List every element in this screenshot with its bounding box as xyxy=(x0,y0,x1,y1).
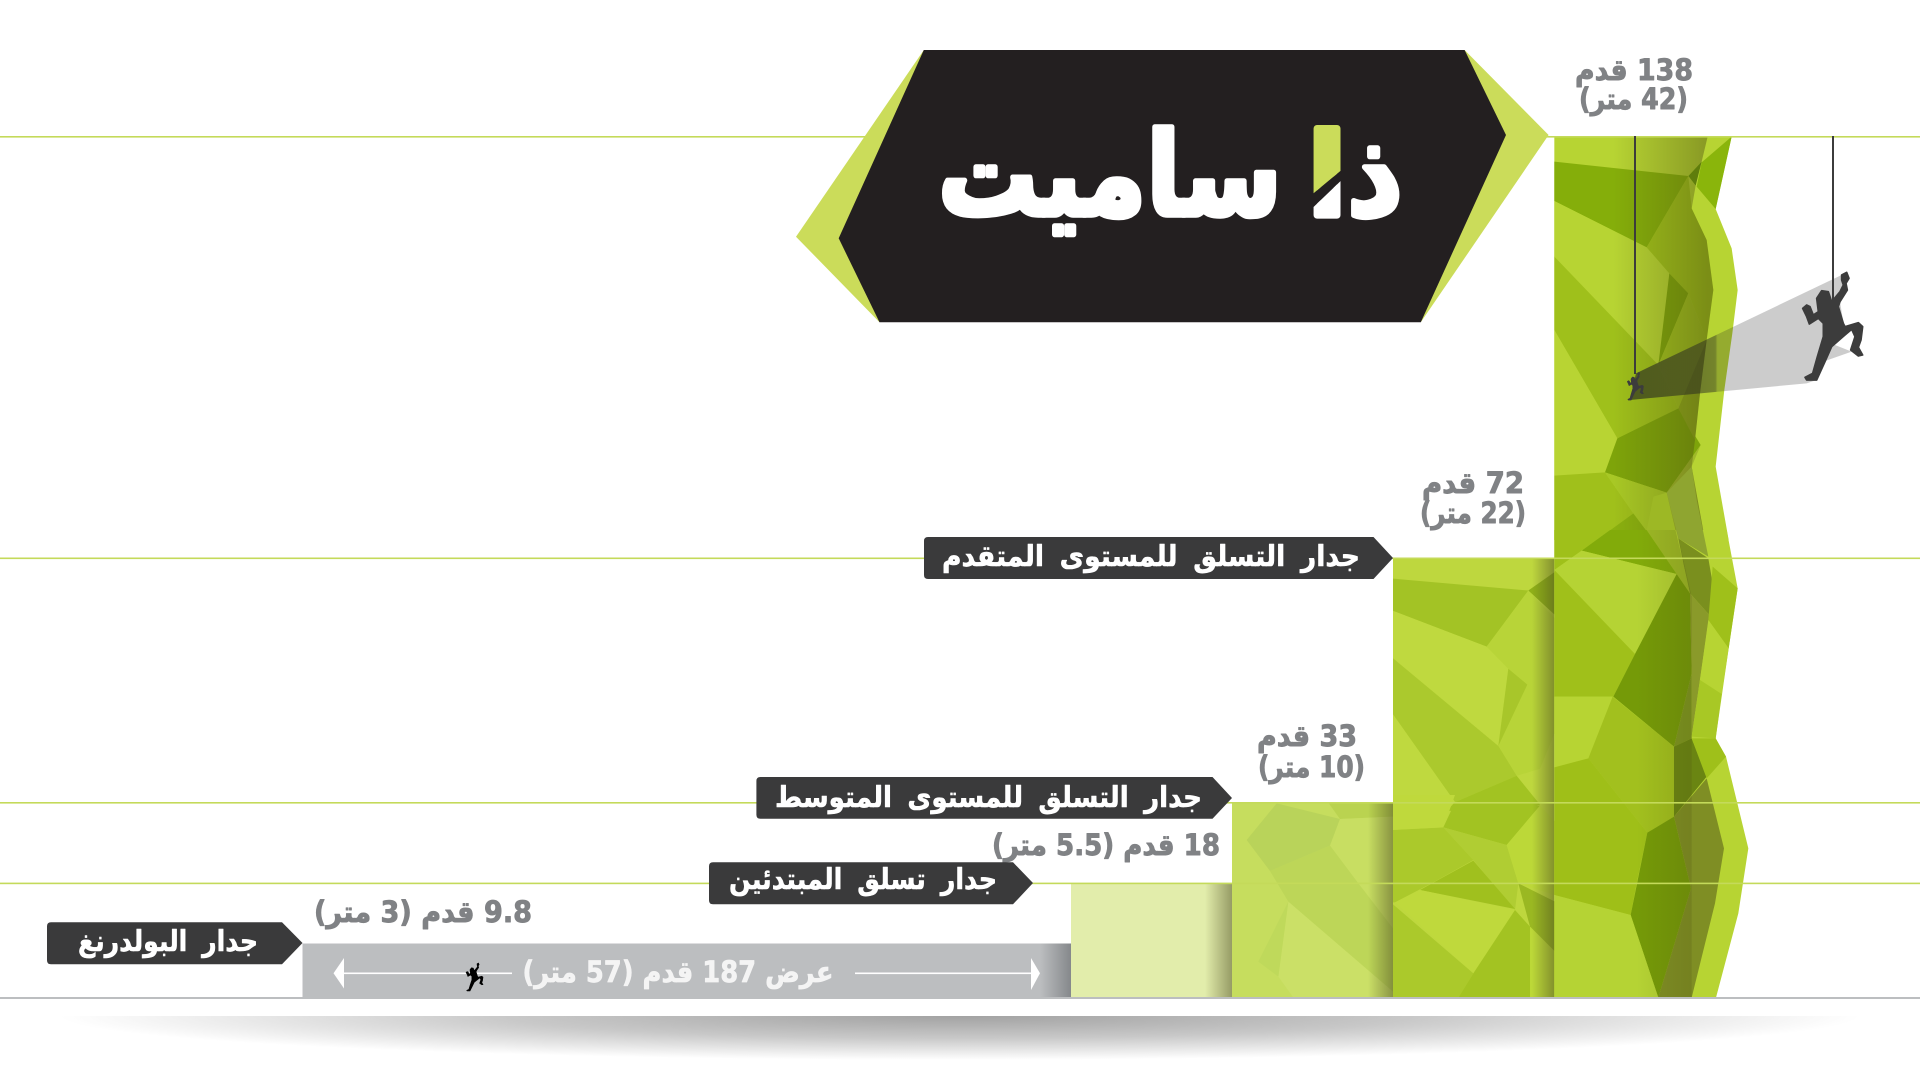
advanced wall xyxy=(1393,558,1555,998)
level guide lines xyxy=(0,136,1920,884)
intermediate wall xyxy=(1232,803,1393,998)
icon: mini climber xyxy=(466,963,483,991)
width text: عرض 187 قدم (57 متر) xyxy=(522,955,834,989)
height label: 72 ft: 72 قدم xyxy=(1422,466,1524,500)
height label: 33 ft: 33 قدم xyxy=(1257,719,1357,753)
width dimension xyxy=(334,955,1040,991)
tag: bouldering wall xyxy=(47,922,302,964)
height label: 138 ft: 138 قدم xyxy=(1575,53,1693,87)
title word: ساميت xyxy=(938,108,1282,243)
left arrow xyxy=(334,958,512,988)
title alef top: ا xyxy=(1307,109,1347,242)
tag: bouldering wall: جدار البولدرنغ xyxy=(78,924,258,958)
height label: 33 ft xyxy=(1257,719,1365,784)
tag: intermediate wall: جدار التسلق للمستوى المتوسط xyxy=(775,780,1202,814)
height label: 138 ft: (42 متر) xyxy=(1579,82,1688,116)
beginner wall xyxy=(1071,883,1232,998)
title badge xyxy=(796,50,1549,322)
rope and small climber xyxy=(1627,136,1643,400)
title alef bottom: ا xyxy=(1307,109,1347,242)
height label: 33 ft: (10 متر) xyxy=(1258,750,1365,784)
ground shadow xyxy=(40,1016,1880,1062)
right arrow xyxy=(855,958,1040,990)
height label: 72 ft: (22 متر) xyxy=(1420,496,1526,530)
height label: 18 ft: 18 قدم (5.5 متر) xyxy=(992,828,1220,862)
rope and large climber xyxy=(1803,136,1863,380)
tag: beginner wall: جدار تسلق المبتدئين xyxy=(729,862,997,896)
height label: 9.8 ft: 9.8 قدم (3 متر) xyxy=(314,895,532,929)
summit wall xyxy=(1554,137,1748,998)
magnifier beam xyxy=(1630,275,1852,400)
bouldering wall xyxy=(302,944,1071,998)
title letter: ذ xyxy=(1347,108,1403,243)
height label: 138 ft xyxy=(1575,53,1693,116)
height label: 72 ft xyxy=(1420,466,1526,530)
ground line xyxy=(0,997,1920,999)
tag: advanced wall: جدار التسلق للمستوى المتقدم xyxy=(942,539,1360,573)
